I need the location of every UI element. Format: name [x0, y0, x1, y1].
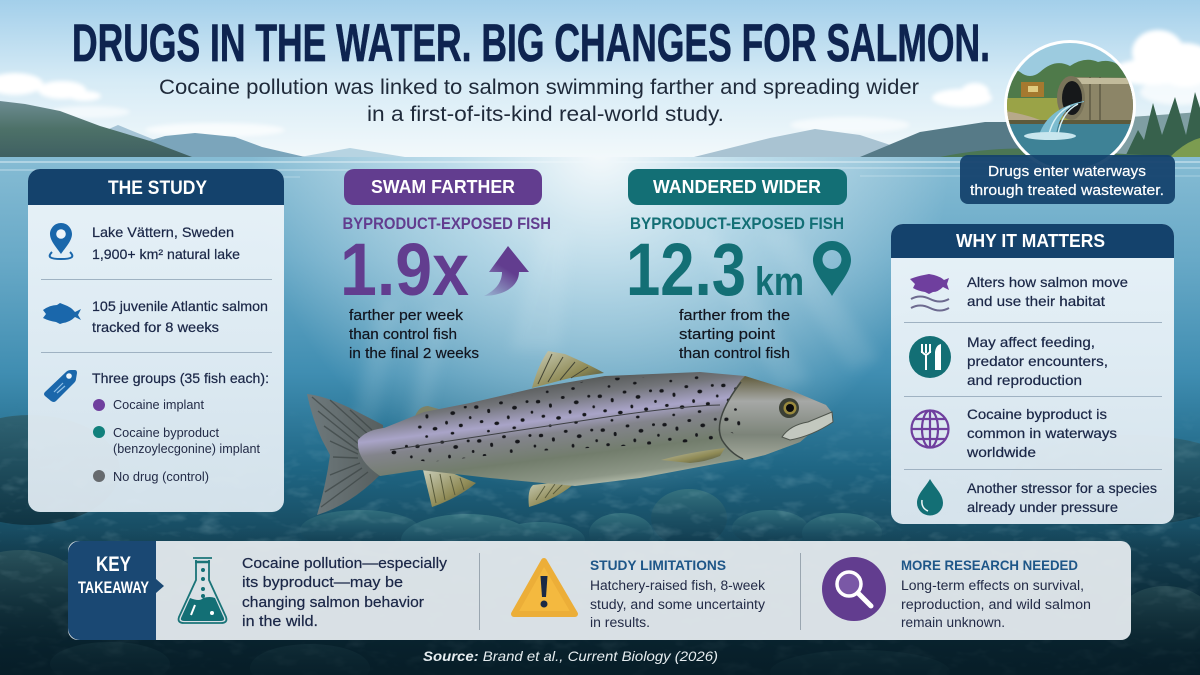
- heading: the study: THE STUDY: [108, 178, 207, 199]
- text: study limitations: [590, 557, 765, 630]
- spots: [375, 375, 740, 462]
- number: 1.9x: 1.9x: [340, 228, 469, 311]
- illustration: wastewater pipe: [1004, 40, 1136, 157]
- icon: water drop: [917, 479, 943, 516]
- text: salmon: [92, 298, 268, 335]
- mouth: [782, 412, 833, 440]
- pectoral fin: [661, 448, 725, 463]
- clouds: [0, 30, 1200, 137]
- text: salmon: tracked for 8 weeks: [92, 319, 219, 335]
- caption: wastewater: Drugs enter waterways: [988, 164, 1146, 180]
- icon: fish: [43, 303, 81, 324]
- illustration: salmon: [307, 351, 833, 515]
- icon: globe: [912, 410, 948, 448]
- text: study limitations: STUDY LIMITATIONS: [590, 557, 726, 573]
- pill: swam farther: SWAM FARTHER: [371, 176, 515, 197]
- text: takeaway: Cocaine pollution—especially: [242, 555, 448, 572]
- text: more research needed: MORE RESEARCH NEEDED: [901, 557, 1078, 573]
- legend: groups: [93, 398, 261, 484]
- icon: warning triangle: [514, 561, 575, 614]
- text: groups: Three groups (35 fish each):: [92, 370, 269, 386]
- caption: wastewater: through treated wastewater.: [970, 183, 1164, 199]
- pill: swam farther: [344, 169, 542, 205]
- text: feeding: [967, 334, 1108, 388]
- label: byproduct-exposed: BYPRODUCT-EXPOSED FISH: [630, 215, 844, 233]
- text: farther from start: farther from the: [679, 308, 790, 324]
- text: takeaway: [242, 555, 448, 630]
- text: feeding: and reproduction: [967, 372, 1082, 388]
- mountains: [0, 92, 1200, 158]
- subtitle: Cocaine pollution was linked to salmon swimming farther and spreading wider: [159, 76, 919, 99]
- legend: groups: (benzoylecgonine) implant: [113, 442, 261, 456]
- text: waterways: [966, 406, 1117, 460]
- text: more research needed: [901, 557, 1091, 630]
- icon: magnifier: [822, 557, 886, 621]
- text: study limitations: Hatchery-raised fish, 8-week: [590, 578, 765, 593]
- text: habitat: Alters how salmon move: [967, 274, 1128, 290]
- tab: key takeaway: KEY: [96, 553, 131, 576]
- text: location: 1,900+ km² natural lake: [92, 246, 240, 262]
- stat: wandered wider: [626, 169, 851, 362]
- text: farther per week: [349, 308, 479, 362]
- text: stressor: already under pressure: [967, 499, 1118, 515]
- tab: key takeaway: TAKEAWAY: [78, 579, 149, 597]
- text: waterways: common in waterways: [967, 425, 1117, 441]
- subtitle: in a first-of-its-kind real-world study.: [367, 103, 724, 126]
- text: feeding: May affect feeding,: [967, 334, 1095, 350]
- text: farther per week: farther per week: [349, 308, 464, 324]
- legend: groups: No drug (control): [113, 470, 209, 484]
- text: farther per week: than control fish: [349, 327, 457, 343]
- source line: Source: Brand et al., Current Biology (2026): [423, 648, 718, 664]
- legend: groups: Cocaine implant: [113, 398, 205, 412]
- icon: map pin: [813, 241, 851, 296]
- text: takeaway: in the wild.: [242, 613, 318, 630]
- icon: flask: [179, 558, 226, 623]
- panel: why it matters: [891, 224, 1174, 524]
- text: stressor: Another stressor for a species: [967, 480, 1157, 496]
- pill: wandered wider: WANDERED WIDER: [653, 176, 821, 197]
- text: location: [92, 224, 240, 262]
- icon: tag: [44, 370, 77, 402]
- text: farther from start: starting point: [679, 327, 775, 343]
- lateral line: [390, 405, 720, 450]
- panel: the study: [28, 169, 284, 512]
- text: takeaway: its byproduct—may be: [242, 574, 403, 591]
- text: study limitations: in results.: [590, 615, 650, 630]
- text: location: Lake Vättern, Sweden: [92, 224, 234, 240]
- number: 12.3 km: 12.3: [626, 228, 746, 311]
- text: waterways: worldwide: [966, 444, 1036, 460]
- legend: groups: Cocaine byproduct: [113, 426, 220, 440]
- fins: [307, 351, 604, 515]
- eye: [779, 398, 799, 418]
- stat: swam farther: [340, 169, 551, 362]
- number: 12.3 km: km: [755, 260, 804, 304]
- text: farther from start: than control fish: [679, 346, 790, 362]
- text: study limitations: study, and some uncertainty: [590, 597, 765, 612]
- heading: why it matters: WHY IT MATTERS: [956, 230, 1105, 251]
- icon: fork and knife: [909, 336, 951, 378]
- text: salmon: 105 juvenile Atlantic salmon: [92, 298, 268, 314]
- text: habitat: [967, 274, 1128, 309]
- text: farther per week: in the final 2 weeks: [349, 346, 479, 362]
- text: feeding: predator encounters,: [967, 353, 1108, 369]
- surface lines: [0, 162, 1200, 177]
- text: more research needed: reproduction, and wild salmon: [901, 597, 1091, 612]
- rocks: [0, 400, 1200, 675]
- tab: key takeaway: [68, 541, 164, 640]
- label: byproduct-exposed: BYPRODUCT-EXPOSED FISH: [342, 215, 551, 233]
- subtitle: [159, 76, 919, 126]
- text: more research needed: remain unknown.: [901, 615, 1005, 630]
- light rays: [350, 230, 880, 440]
- panel: key takeaway: [68, 541, 1131, 640]
- text: waterways: Cocaine byproduct is: [967, 406, 1107, 422]
- water: [0, 157, 1200, 675]
- caption: wastewater: [960, 155, 1175, 204]
- text: takeaway: changing salmon behavior: [242, 594, 424, 611]
- text: farther from start: [679, 308, 790, 362]
- head: [719, 376, 833, 460]
- body: [358, 372, 833, 486]
- icon: fish and waves: [910, 274, 949, 310]
- pill: wandered wider: [628, 169, 847, 205]
- icon: up arrow: [484, 246, 529, 296]
- text: habitat: and use their habitat: [967, 293, 1105, 309]
- icon: location pin: [50, 223, 72, 259]
- text: stressor: [967, 480, 1157, 515]
- text: more research needed: Long-term effects on survival,: [901, 578, 1084, 593]
